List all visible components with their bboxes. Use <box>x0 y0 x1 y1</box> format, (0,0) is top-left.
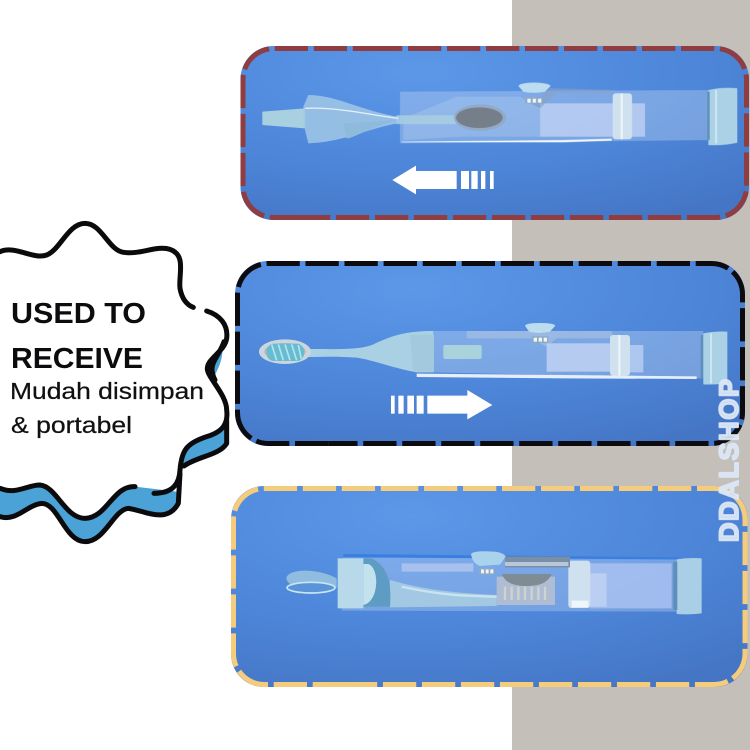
watermark: DDALSHOP <box>714 379 744 542</box>
arrow: pointing left <box>392 166 494 194</box>
text block: description: Mudah disimpan <box>10 378 204 404</box>
text block: description: & portabel <box>11 412 132 438</box>
badge shadow <box>0 347 227 542</box>
panel: open case with brush pulled out backward <box>240 46 749 220</box>
callout: wavy badge <box>0 223 227 542</box>
toothbrush illustration: closed case with strap <box>286 551 702 614</box>
badge outline <box>0 223 227 542</box>
background: grey strip <box>512 0 750 750</box>
heading: used to receive: RECEIVE <box>11 343 143 375</box>
heading: used to receive <box>11 298 146 375</box>
text block: description <box>10 378 204 438</box>
panel: brush stored inside case <box>231 486 748 687</box>
heading: used to receive: USED TO <box>11 298 146 330</box>
panel: brush extended for use <box>235 261 745 446</box>
arrow: pointing right <box>391 390 492 419</box>
toothbrush illustration: bristles first <box>259 323 727 385</box>
toothbrush illustration: handle first <box>262 83 737 145</box>
